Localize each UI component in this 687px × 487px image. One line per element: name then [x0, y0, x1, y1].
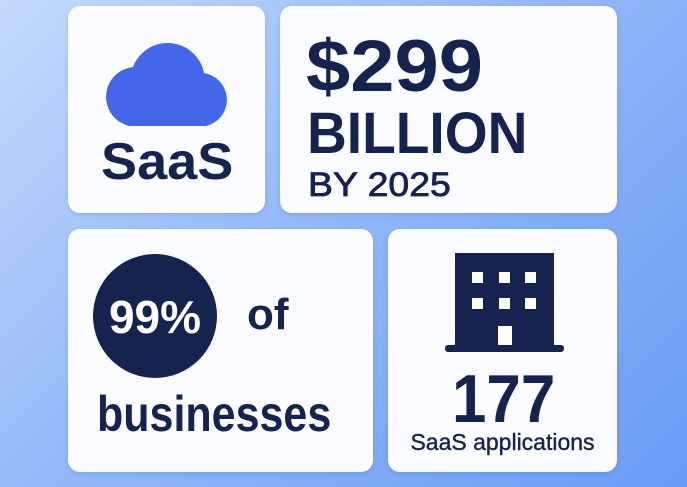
- text: 177: 177: [452, 361, 555, 437]
- icon: cloud: [106, 43, 227, 126]
- text: BY 2025: BY 2025: [308, 166, 451, 204]
- text: SaaS applications: SaaS applications: [410, 429, 595, 455]
- text: businesses: businesses: [97, 386, 331, 442]
- text: SaaS: SaaS: [101, 133, 233, 191]
- icon: building: [445, 253, 564, 352]
- circle: 99%: 99%: [109, 291, 201, 343]
- text: BILLION: BILLION: [307, 101, 527, 166]
- text: of: of: [247, 290, 289, 339]
- panel: market size: [280, 6, 617, 213]
- panel: SaaS cloud: [68, 6, 265, 213]
- text: $299: $299: [306, 26, 483, 107]
- circle: 99%: [93, 254, 217, 378]
- panel: applications: [388, 229, 617, 472]
- panel: businesses: [68, 229, 373, 472]
